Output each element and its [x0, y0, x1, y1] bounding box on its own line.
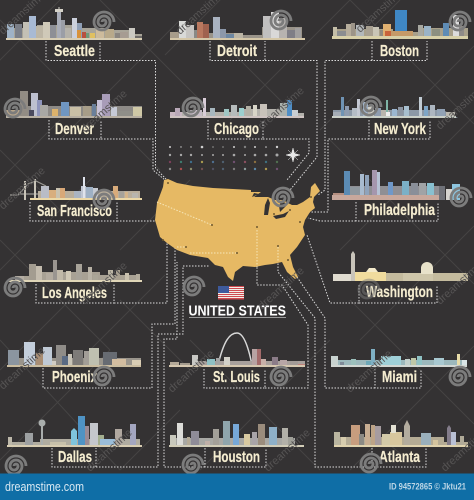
panel: Phoenix: [7, 342, 152, 388]
city label: Phoenix: Phoenix: [52, 369, 97, 386]
skyline: Los Angeles: [7, 260, 142, 282]
panel: Denver: [6, 91, 142, 139]
skyline: Detroit: [170, 12, 305, 40]
watermark: spirals and text: dreamstime: [262, 427, 313, 474]
skyline: Washington: [333, 251, 468, 281]
city label: Phoenix: [43, 368, 152, 388]
skyline: New York: [332, 97, 458, 118]
panel: Dallas: [7, 416, 142, 467]
city label: Miami: Miami: [382, 369, 417, 386]
watermark: spirals and text: dreamstime: [256, 265, 307, 312]
city label: Detroit: Detroit: [217, 43, 258, 60]
map: United States: [155, 179, 320, 281]
skyline: Phoenix: [7, 342, 141, 367]
skyline: Houston: [169, 421, 304, 447]
skyline: Denver: [6, 91, 142, 118]
panel: Houston: [169, 421, 304, 467]
watermark: spirals and text: dreamstime: [344, 348, 395, 395]
watermark: spirals and text: dreamstime: [166, 348, 217, 395]
skyline: San Francisco: [10, 177, 142, 200]
skyline: Chicago: [170, 98, 304, 118]
city label: Philadelphia: Philadelphia: [364, 202, 435, 219]
watermark: spirals and text: dreamstime: [84, 427, 135, 474]
city label: Denver: Denver: [55, 121, 94, 138]
panel: San Francisco: [10, 177, 142, 221]
skyline: Boston: [332, 10, 468, 39]
panel: Seattle: [6, 7, 142, 60]
icon legend grid: [169, 146, 278, 170]
panel: Boston: [332, 10, 468, 60]
skyline: St. Louis: [169, 333, 305, 367]
skyline: Philadelphia: [332, 170, 460, 200]
title: United States: UNITED STATES: [188, 304, 286, 320]
panel: Chicago: [170, 98, 304, 139]
panel: Miami: [331, 349, 467, 388]
panel: Philadelphia: [332, 170, 460, 221]
skyline: Atlanta: [334, 420, 468, 447]
panel: New York: [332, 97, 458, 139]
panel: Atlanta: [334, 420, 468, 467]
skyline: Miami: [331, 349, 467, 367]
city label: Seattle: Seattle: [54, 43, 95, 60]
city label: St. Louis: St. Louis: [213, 369, 260, 386]
city markers: [162, 182, 312, 261]
panel: St. Louis: [169, 333, 305, 388]
watermark: spirals and text: dreamstime: [256, 85, 307, 132]
footer brand: dreamstime.com: [5, 480, 84, 494]
city label: Chicago: Chicago: [214, 121, 259, 138]
icon: compass rose: [286, 148, 300, 162]
skyline: Seattle: [6, 7, 142, 40]
panel: Detroit: [170, 12, 305, 60]
panel: Los Angeles: [7, 260, 142, 303]
icon: American flag: [218, 286, 244, 300]
watermark: spirals and text: dreamstime: [79, 88, 130, 135]
city label: New York: New York: [374, 121, 426, 138]
skyline: Dallas: [7, 416, 142, 447]
city label: Washington: Washington: [366, 284, 433, 301]
connector lines from city labels to the map: [96, 60, 375, 467]
panel: Washington: [333, 251, 468, 303]
city label: Boston: Boston: [380, 43, 419, 60]
city label: Dallas: Dallas: [58, 449, 92, 466]
city label: Atlanta: Atlanta: [379, 449, 420, 466]
city label: Houston: Houston: [213, 449, 260, 466]
lakes on map: [252, 193, 289, 219]
city label: San Francisco: San Francisco: [37, 203, 112, 220]
footer bar: [0, 474, 474, 500]
city label: Los Angeles: Los Angeles: [42, 285, 107, 302]
watermark: spirals and text: dreamstime: [79, 260, 130, 307]
map route lines: [157, 202, 278, 267]
